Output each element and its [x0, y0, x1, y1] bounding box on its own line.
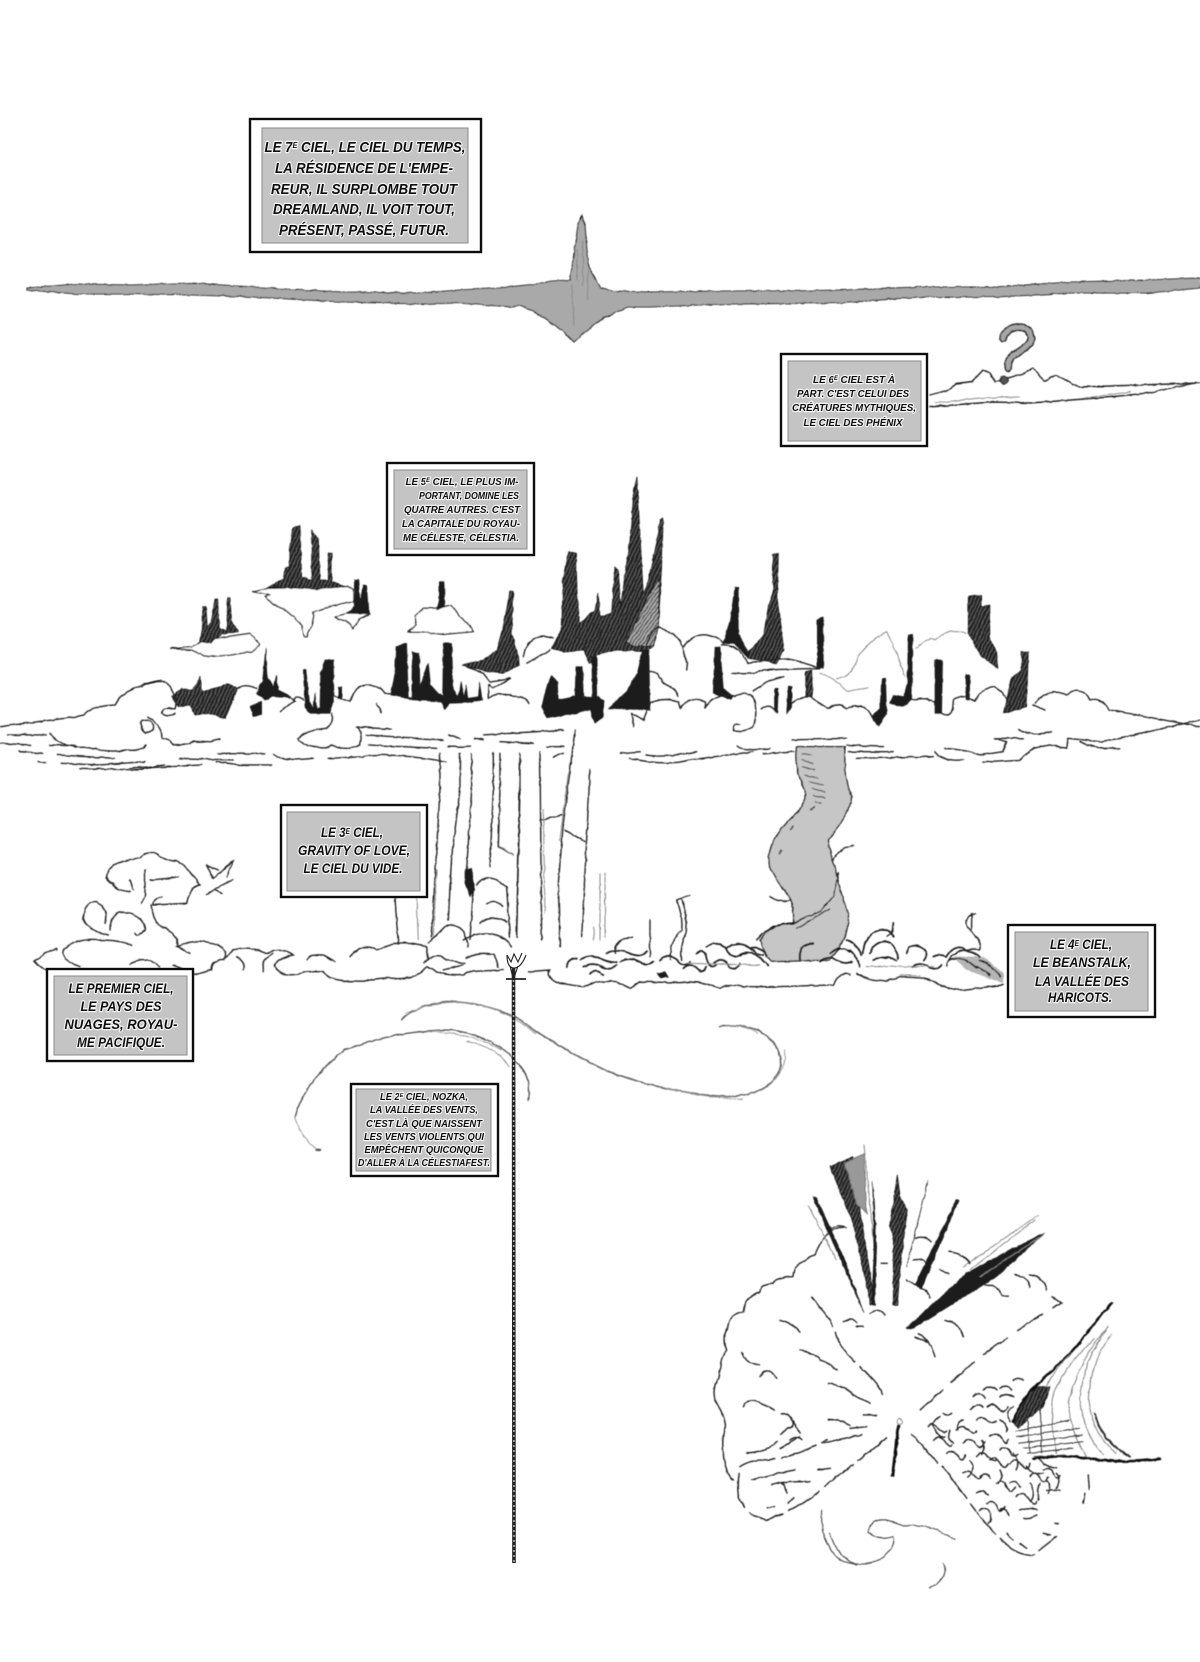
cloud wisps: [620, 720, 1200, 763]
caption text: ME CÉLESTE, CÉLESTIA.: [403, 531, 519, 544]
wavy sector: [911, 1378, 1089, 1555]
illustration: wind streaks of the second sky: [295, 1002, 785, 1151]
caption text: LE 6: [813, 374, 835, 386]
caption text: [792, 373, 916, 429]
caption fill: [788, 361, 921, 441]
towers: [713, 553, 1028, 727]
illustration: fourth sky, bean vine thicket: [528, 895, 1003, 990]
cloud outlines: [632, 627, 1200, 731]
caption text: EMPÊCHENT QUICONQUE: [364, 1143, 484, 1156]
caption frame: [47, 969, 193, 1061]
caption: fifth sky: [387, 463, 534, 555]
caption text: [1033, 936, 1131, 1005]
horn sector: [1013, 1303, 1160, 1461]
caption text: [264, 139, 466, 239]
caption text: DREAMLAND, IL VOIT TOUT,: [273, 201, 455, 218]
caption text: CIEL, NOZKA,: [403, 1092, 468, 1103]
caption frame: [781, 354, 927, 446]
illustration: fifth sky, right half of Celestia: [620, 553, 1200, 763]
caption frame: [351, 1084, 498, 1176]
caption text: LE 4: [1050, 936, 1080, 952]
caption frame: [250, 119, 481, 252]
towers at the cloud line: [172, 643, 604, 723]
caption text: CRÉATURES MYTHIQUES,: [792, 401, 916, 414]
caption text: CIEL, LE PLUS IM-: [430, 476, 519, 488]
caption text: [358, 1092, 490, 1169]
caption text: [64, 980, 178, 1050]
caption text: ME PACIFIQUE.: [77, 1034, 165, 1050]
caption text: LE PREMIER CIEL,: [68, 980, 174, 996]
illustration: beanstalk: [760, 747, 853, 962]
caption text: PORTANT, DOMINE LES: [419, 490, 519, 502]
caption text: LE CIEL DES PHÉNIX: [804, 416, 903, 429]
illustration: central rope: [512, 968, 516, 1563]
caption text: [298, 824, 410, 876]
central pin: [893, 1419, 902, 1477]
caption: fourth sky: [1008, 925, 1155, 1017]
caption text: CIEL,: [1079, 936, 1112, 952]
illustration: first sky, cloud land and tree-shaped cloud: [33, 852, 512, 982]
illustration: third sky, vertical pillars: [395, 730, 650, 957]
illustration: sixth sky cloud with question mark: [930, 327, 1200, 407]
cloud outlines and wisps: [142, 636, 553, 748]
floating islands: [171, 525, 519, 673]
illustration: fan-shaped top view of the skies: [714, 1145, 1160, 1588]
caption text: CIEL,: [350, 824, 383, 840]
caption: sixth sky: [781, 354, 927, 446]
caption text: E: [426, 478, 431, 484]
caption text: LE BEANSTALK,: [1033, 954, 1131, 970]
caption text: CIEL EST À: [838, 373, 895, 386]
caption fill: [356, 1089, 491, 1171]
caption text: E: [293, 141, 298, 150]
caption text: PRÉSENT, PASSÉ, FUTUR.: [279, 222, 449, 239]
big central towers: [552, 477, 663, 710]
caption text: E: [1075, 939, 1080, 948]
caption text: LE 3: [321, 824, 351, 840]
caption: third sky: [281, 805, 427, 897]
caption text: LA CAPITALE DU ROYAU-: [402, 518, 520, 530]
caption frame: [1008, 925, 1155, 1017]
caption frame: [281, 805, 427, 897]
caption text: CIEL, LE CIEL DU TEMPS,: [297, 139, 466, 156]
caption fill: [394, 470, 527, 549]
caption text: LA VALLÉE DES: [1035, 973, 1130, 989]
caption text: C'EST LÀ QUE NAISSENT: [366, 1117, 483, 1130]
caption text: REUR, IL SURPLOMBE TOUT: [271, 181, 459, 198]
caption fill: [54, 976, 187, 1055]
swirl strokes below the fan: [822, 1510, 955, 1588]
caption text: LA VALLÉE DES VENTS,: [370, 1103, 478, 1116]
caption text: PART. C'EST CELUI DES: [797, 388, 909, 400]
illustration: far-left cloud of the fifth sky: [0, 680, 165, 770]
cloud sector: [714, 1227, 887, 1520]
caption text: E: [400, 1093, 403, 1099]
caption fill: [1015, 932, 1148, 1011]
caption text: GRAVITY OF LOVE,: [298, 842, 410, 858]
icon: rope crown: [506, 953, 526, 979]
caption: seventh sky: [250, 119, 481, 252]
sky sector marks: [830, 1226, 1062, 1357]
caption text: LE 5: [406, 476, 428, 488]
icon: question mark: [1000, 327, 1031, 384]
bird sketch: [207, 860, 233, 895]
illustration: seventh sky band with central spire: [27, 216, 1200, 342]
caption text: [402, 476, 521, 544]
caption text: LES VENTS VIOLENTS QUI: [364, 1132, 484, 1143]
caption text: E: [834, 376, 839, 382]
caption text: LE 7: [264, 139, 296, 156]
caption: first sky: [47, 969, 193, 1061]
caption text: LE CIEL DU VIDE.: [304, 860, 402, 876]
caption text: HARICOTS.: [1048, 989, 1112, 1005]
caption frame: [387, 463, 534, 555]
caption text: D'ALLER À LA CÉLESTIAFEST.: [358, 1156, 490, 1169]
caption text: QUATRE AUTRES. C'EST: [404, 504, 521, 516]
illustration: fifth sky, left half of Celestia: [130, 477, 663, 768]
caption text: NUAGES, ROYAU-: [64, 1016, 178, 1032]
dark rays: [808, 1145, 1045, 1328]
caption text: LE PAYS DES: [80, 998, 162, 1014]
caption fill: [262, 128, 468, 243]
caption text: LE 2: [380, 1092, 401, 1103]
caption text: E: [346, 827, 351, 836]
caption: second sky: [351, 1084, 498, 1176]
caption text: LA RÉSIDENCE DE L'EMPE-: [275, 160, 453, 177]
caption fill: [287, 812, 420, 891]
